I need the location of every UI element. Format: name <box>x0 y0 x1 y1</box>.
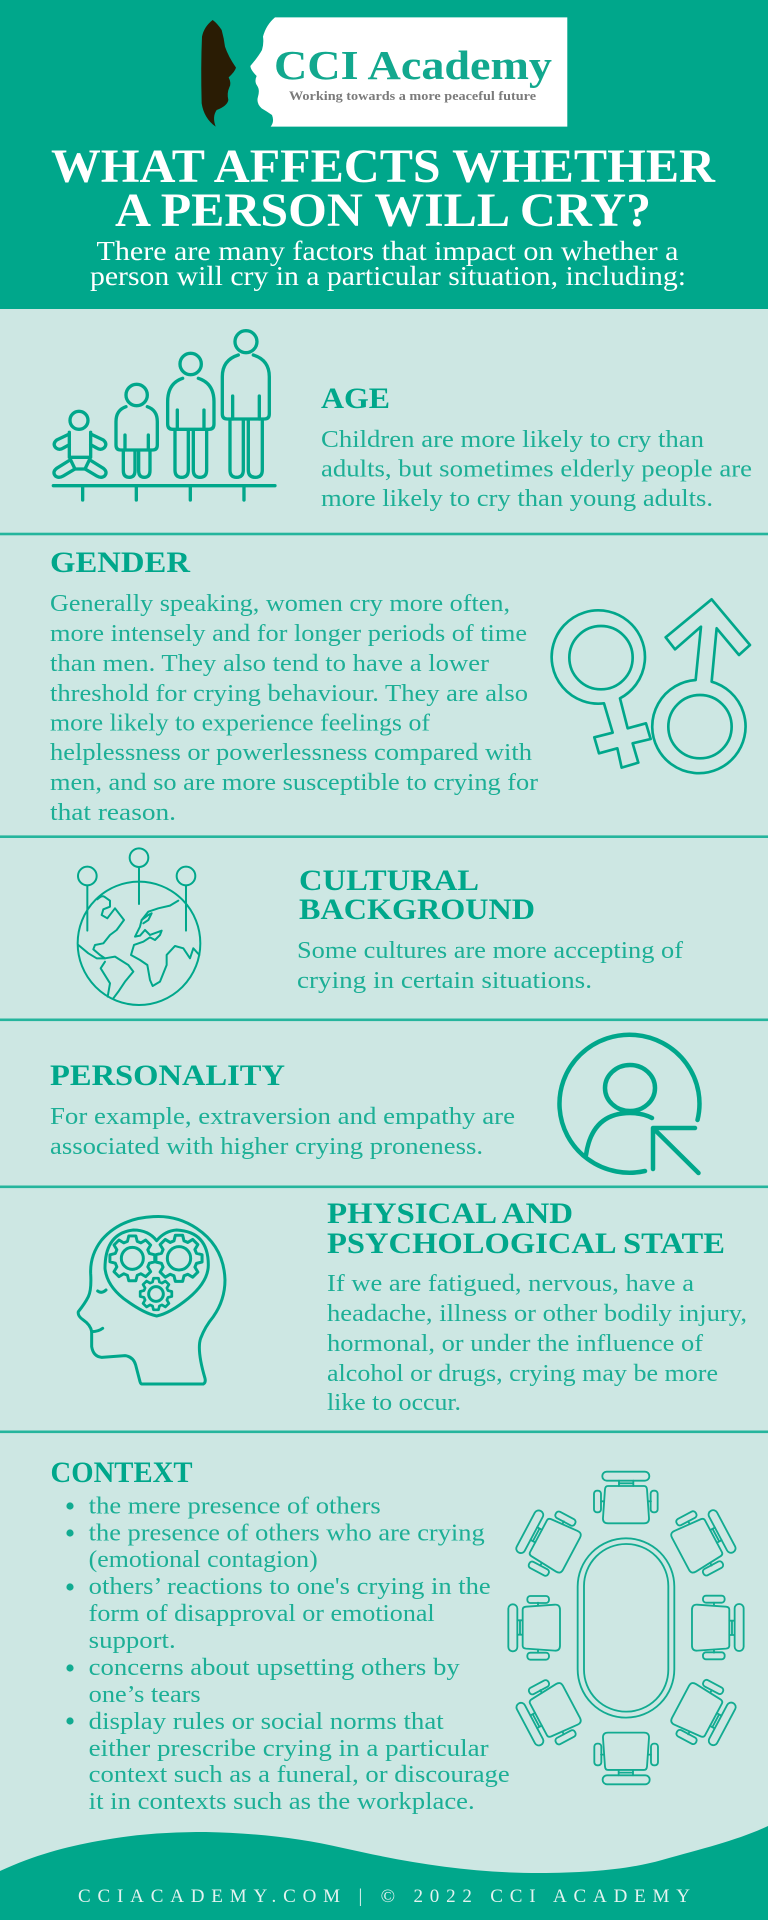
text: gender: helplessness or powerlessness compared with <box>50 740 532 766</box>
logo: tagline: Working towards a more peaceful future <box>289 88 536 103</box>
text: cultural background <box>297 938 683 994</box>
text: physical and psychological state: like to occur. <box>327 1390 461 1416</box>
panel: personality <box>0 1020 768 1187</box>
subtitle <box>90 236 686 291</box>
panel: physical and psychological state <box>0 1187 768 1432</box>
logo <box>201 17 567 127</box>
footer text: CCIACADEMY.COM | © 2022 CCI ACADEMY <box>78 1886 690 1907</box>
title <box>51 140 716 237</box>
icon: person in circle with cursor arrow <box>559 1035 699 1173</box>
text: gender: that reason. <box>50 800 176 826</box>
panel: age <box>0 309 768 534</box>
logo: dark face silhouette <box>201 20 236 127</box>
text: cultural background: crying in certain situations. <box>297 968 592 994</box>
text: physical and psychological state: alcohol or drugs, crying may be more <box>327 1361 718 1387</box>
list: context factors: the mere presence of others <box>89 1494 381 1520</box>
heading: physical and psychological state <box>327 1197 725 1260</box>
subtitle: person will cry in a particular situation, including: <box>90 261 686 291</box>
list: context factors: context such as a funeral, or discourage <box>89 1762 510 1788</box>
text: physical and psychological state: If we are fatigued, nervous, have a <box>327 1271 694 1297</box>
heading: personality: PERSONALITY <box>50 1059 285 1092</box>
list: context factors: form of disapproval or emotional <box>89 1601 435 1627</box>
list: context factors: others’ reactions to one's crying in the <box>89 1574 491 1600</box>
heading: context: CONTEXT <box>50 1456 192 1489</box>
text: gender: more likely to experience feelings of <box>50 710 430 736</box>
heading: cultural background <box>299 864 535 926</box>
title: A PERSON WILL CRY? <box>115 184 651 237</box>
text: personality <box>50 1104 515 1160</box>
panel: gender <box>0 534 768 837</box>
icon: four people growing in age <box>53 331 275 500</box>
text: gender: threshold for crying behaviour. They are also <box>50 681 528 707</box>
icon: globe with pins <box>78 848 200 1005</box>
icon: female and male symbols <box>552 599 750 773</box>
header band <box>0 0 768 309</box>
text: physical and psychological state <box>327 1271 747 1416</box>
list: context factors: the presence of others who are crying <box>89 1520 485 1546</box>
text: age: adults, but sometimes elderly people are <box>321 456 752 482</box>
text: gender: men, and so are more susceptible to crying for <box>50 770 538 796</box>
text: age: more likely to cry than young adults. <box>321 486 713 512</box>
list: context factors: support. <box>89 1628 176 1654</box>
text: personality: associated with higher crying proneness. <box>50 1134 483 1160</box>
heading: cultural background: BACKGROUND <box>299 893 535 926</box>
footer wave <box>0 1826 768 1920</box>
list: context factors <box>66 1494 510 1815</box>
list: context factors: concerns about upsetting others by <box>89 1655 460 1681</box>
icon: meeting table with eight chairs <box>508 1472 744 1784</box>
panel: context <box>0 1432 768 1832</box>
text: gender <box>50 591 538 826</box>
text: gender: than men. They also tend to have a lower <box>50 651 489 677</box>
list: context factors: one’s tears <box>89 1682 201 1708</box>
heading: gender: GENDER <box>50 546 190 579</box>
heading: cultural background: CULTURAL <box>299 864 479 897</box>
heading: physical and psychological state: PSYCHOLOGICAL STATE <box>327 1227 725 1260</box>
text: age <box>321 427 752 512</box>
list: context factors: it in contexts such as the workplace. <box>89 1789 475 1815</box>
text: gender: more intensely and for longer periods of time <box>50 621 527 647</box>
panel: cultural background <box>0 837 768 1020</box>
list: context factors: display rules or social norms that <box>89 1709 444 1735</box>
heading: age: AGE <box>321 382 390 415</box>
title: WHAT AFFECTS WHETHER <box>51 140 716 193</box>
text: physical and psychological state: hormonal, or under the influence of <box>327 1331 703 1357</box>
text: physical and psychological state: headache, illness or other bodily injury, <box>327 1301 747 1327</box>
text: personality: For example, extraversion and empathy are <box>50 1104 515 1130</box>
logo: white face panel <box>250 17 567 127</box>
text: cultural background: Some cultures are more accepting of <box>297 938 683 964</box>
list: context factors: (emotional contagion) <box>89 1547 318 1573</box>
heading: physical and psychological state: PHYSICAL AND <box>327 1197 573 1230</box>
icon: head with heart and gears <box>78 1216 225 1384</box>
subtitle: There are many factors that impact on whether a <box>96 236 679 266</box>
list: context factors: either prescribe crying in a particular <box>89 1736 489 1762</box>
logo: name: CCI Academy <box>274 42 553 88</box>
text: age: Children are more likely to cry than <box>321 427 704 453</box>
text: gender: Generally speaking, women cry more often, <box>50 591 510 617</box>
